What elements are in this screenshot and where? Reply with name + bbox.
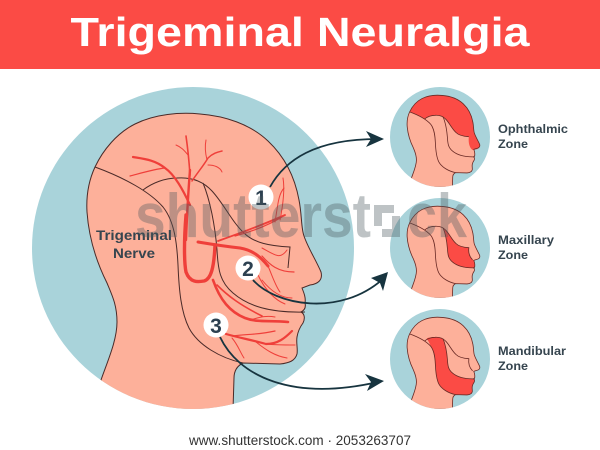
label: Trigeminal Nerve: Nerve xyxy=(113,246,156,261)
badge 2 xyxy=(236,256,260,281)
label: Maxillary Zone: Zone xyxy=(498,250,528,262)
label: Maxillary Zone xyxy=(498,235,555,262)
trigeminal nerve branches xyxy=(130,136,295,358)
badge 2: 2 xyxy=(242,258,254,281)
arrow: zone 2 xyxy=(253,272,388,304)
title banner: Trigeminal Neuralgia xyxy=(70,9,531,55)
label: Ophthalmic Zone: Ophthalmic xyxy=(498,124,569,136)
badge 3 xyxy=(204,312,228,338)
watermark: shutterst xyxy=(135,182,371,251)
maxillary zone icon xyxy=(390,198,490,298)
label: Mandibular Zone: Zone xyxy=(498,361,528,373)
ophthalmic zone icon xyxy=(390,87,490,187)
badge 3: 3 xyxy=(210,315,222,338)
badge 1: 1 xyxy=(255,187,267,210)
footer url: www.shutterstock.com · 2053263707 xyxy=(188,433,411,448)
watermark: ck xyxy=(407,182,467,251)
label: Maxillary Zone: Maxillary xyxy=(498,235,555,247)
arrow: zone 3 xyxy=(220,337,384,391)
label: Ophthalmic Zone xyxy=(498,124,569,151)
label: Mandibular Zone: Mandibular xyxy=(498,346,567,358)
arrow: zone 1 xyxy=(270,131,384,187)
mandibular zone icon xyxy=(390,309,490,409)
title banner xyxy=(0,0,600,69)
label: Trigeminal Nerve: Trigeminal xyxy=(96,228,172,243)
main head illustration xyxy=(32,87,354,410)
badge 1 xyxy=(248,184,274,210)
label: Ophthalmic Zone: Zone xyxy=(498,139,528,151)
label: Trigeminal Nerve xyxy=(96,228,172,261)
label: Mandibular Zone xyxy=(498,346,567,373)
